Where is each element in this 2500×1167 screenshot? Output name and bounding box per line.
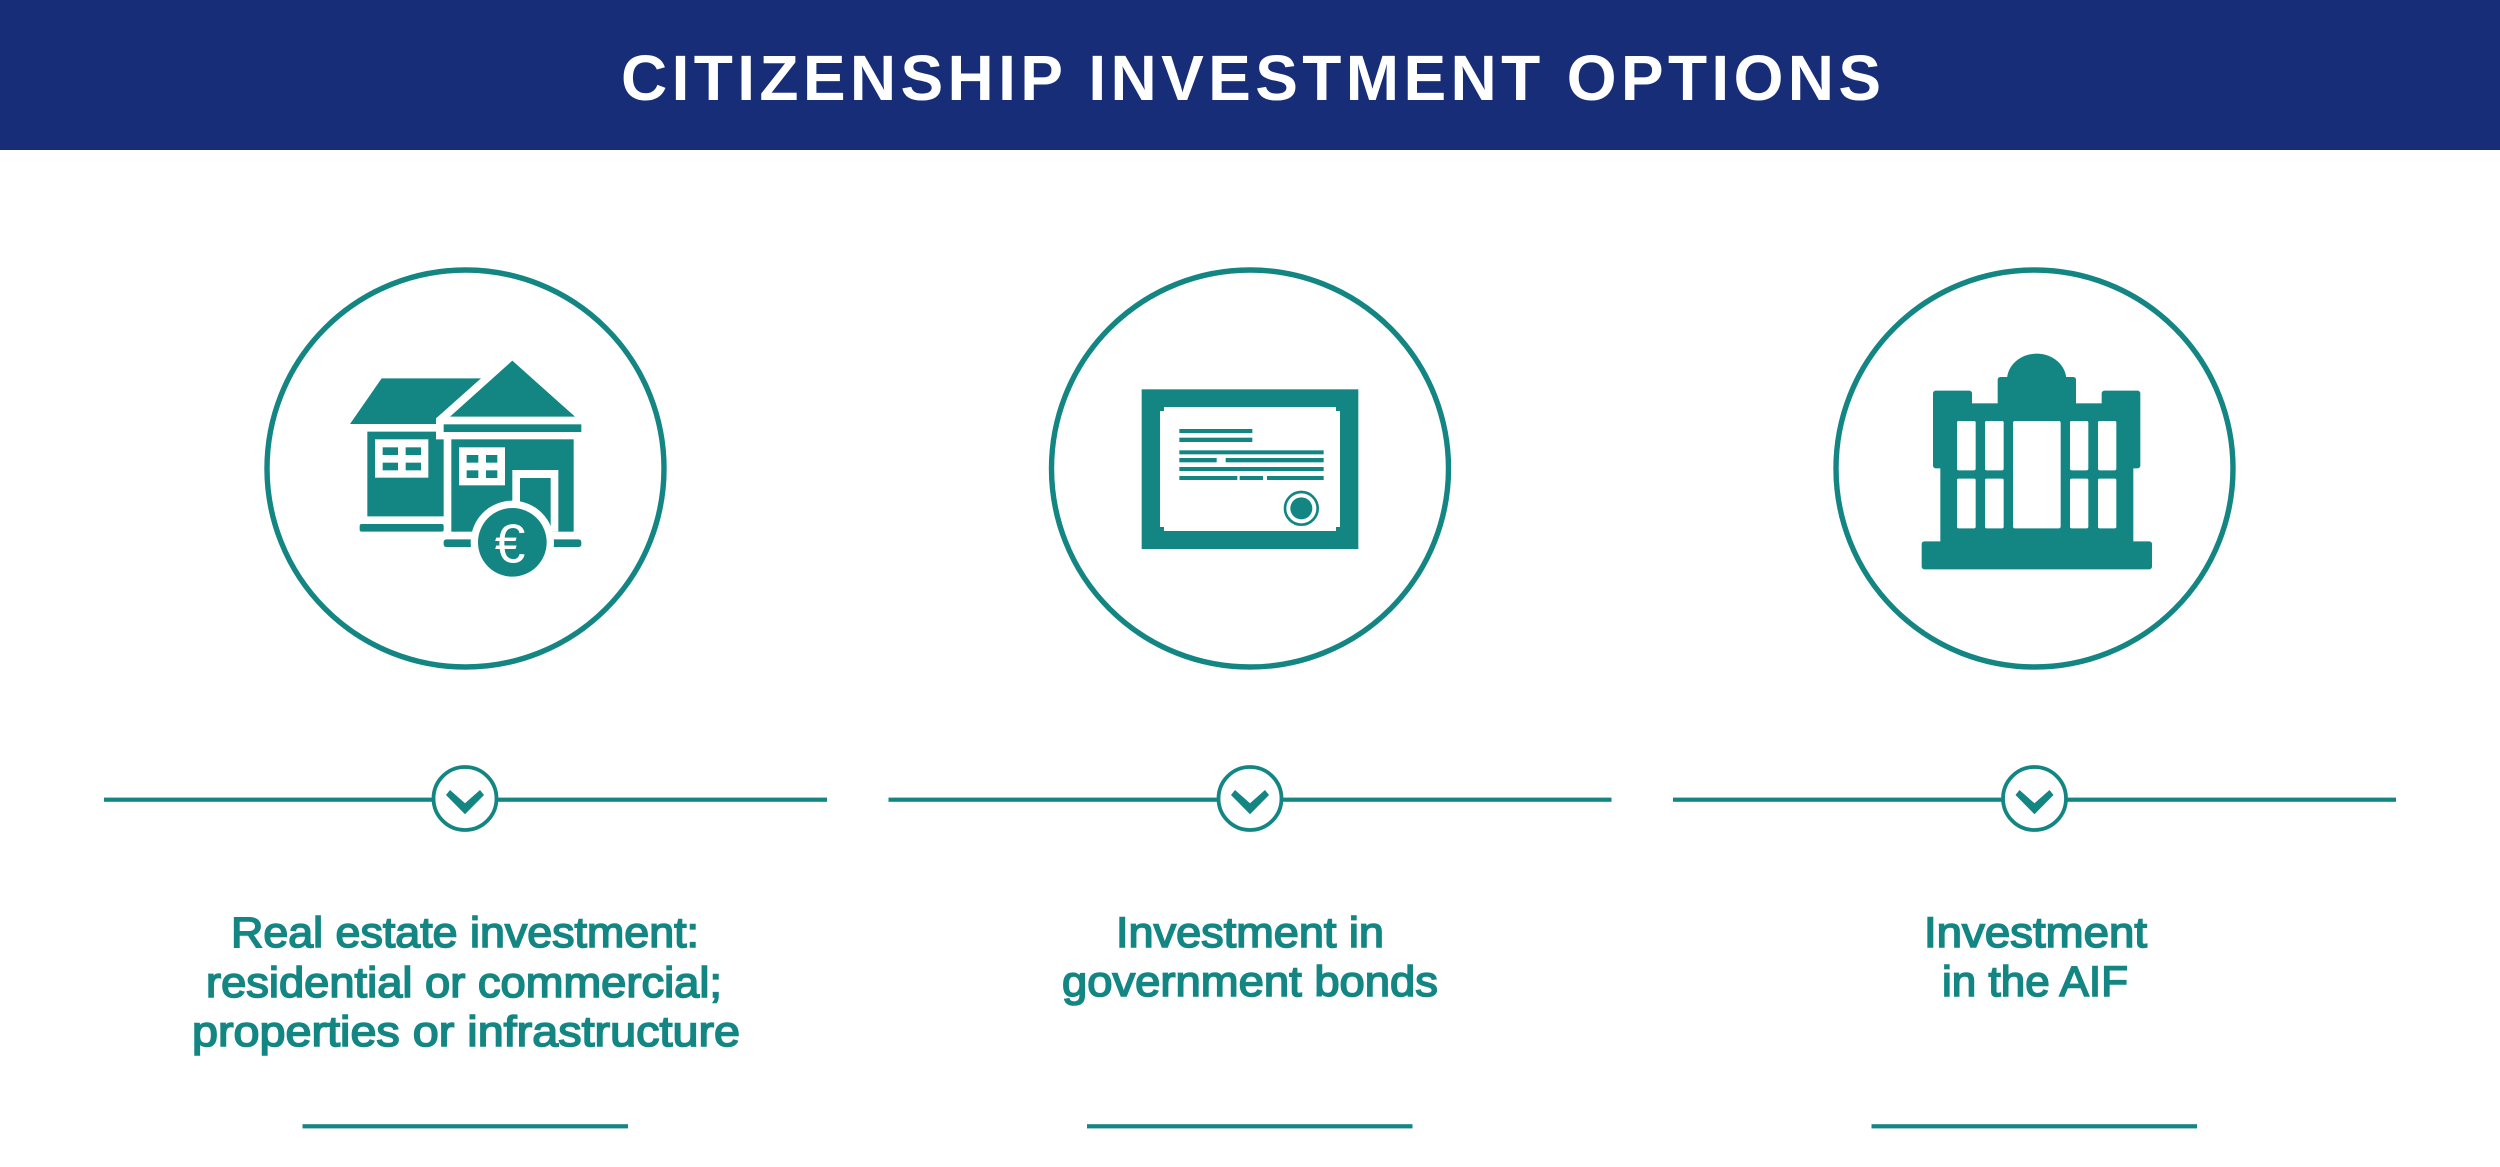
bottom rule [1872,1124,2197,1128]
label text: government bonds [1062,958,1438,1006]
label text: in the AIF [1942,958,2128,1006]
panel: investment in the AIF [1673,270,2396,1128]
label text [192,909,740,1056]
label text: Investment in [1116,909,1384,957]
icon: institution building [1922,354,2152,569]
icon: houses with euro coin: € [495,512,525,574]
label text [1062,909,1438,1006]
title: CITIZENSHIP INVESTMENT OPTIONS [621,42,1881,114]
panel: real estate investment [104,270,827,1128]
divider with chevron [888,767,1612,830]
label text: Real estate investment: [231,909,699,957]
icon circle: AIF [1836,270,2233,667]
icon circle: bonds [1052,270,1448,667]
label text: Investment [1924,909,2147,957]
header banner [0,0,2500,150]
divider with chevron [1673,767,2396,830]
icon: bond certificate [1142,389,1358,549]
label text: properties or infrastructure [192,1008,740,1056]
panel: government bonds [888,270,1612,1128]
label text: residential or commercial; [206,959,722,1007]
bottom rule [302,1124,628,1128]
divider with chevron [104,767,827,830]
label text [1924,909,2147,1006]
icon circle: real estate [267,270,664,667]
bottom rule [1087,1124,1412,1128]
icon: houses with euro coin [350,361,581,584]
